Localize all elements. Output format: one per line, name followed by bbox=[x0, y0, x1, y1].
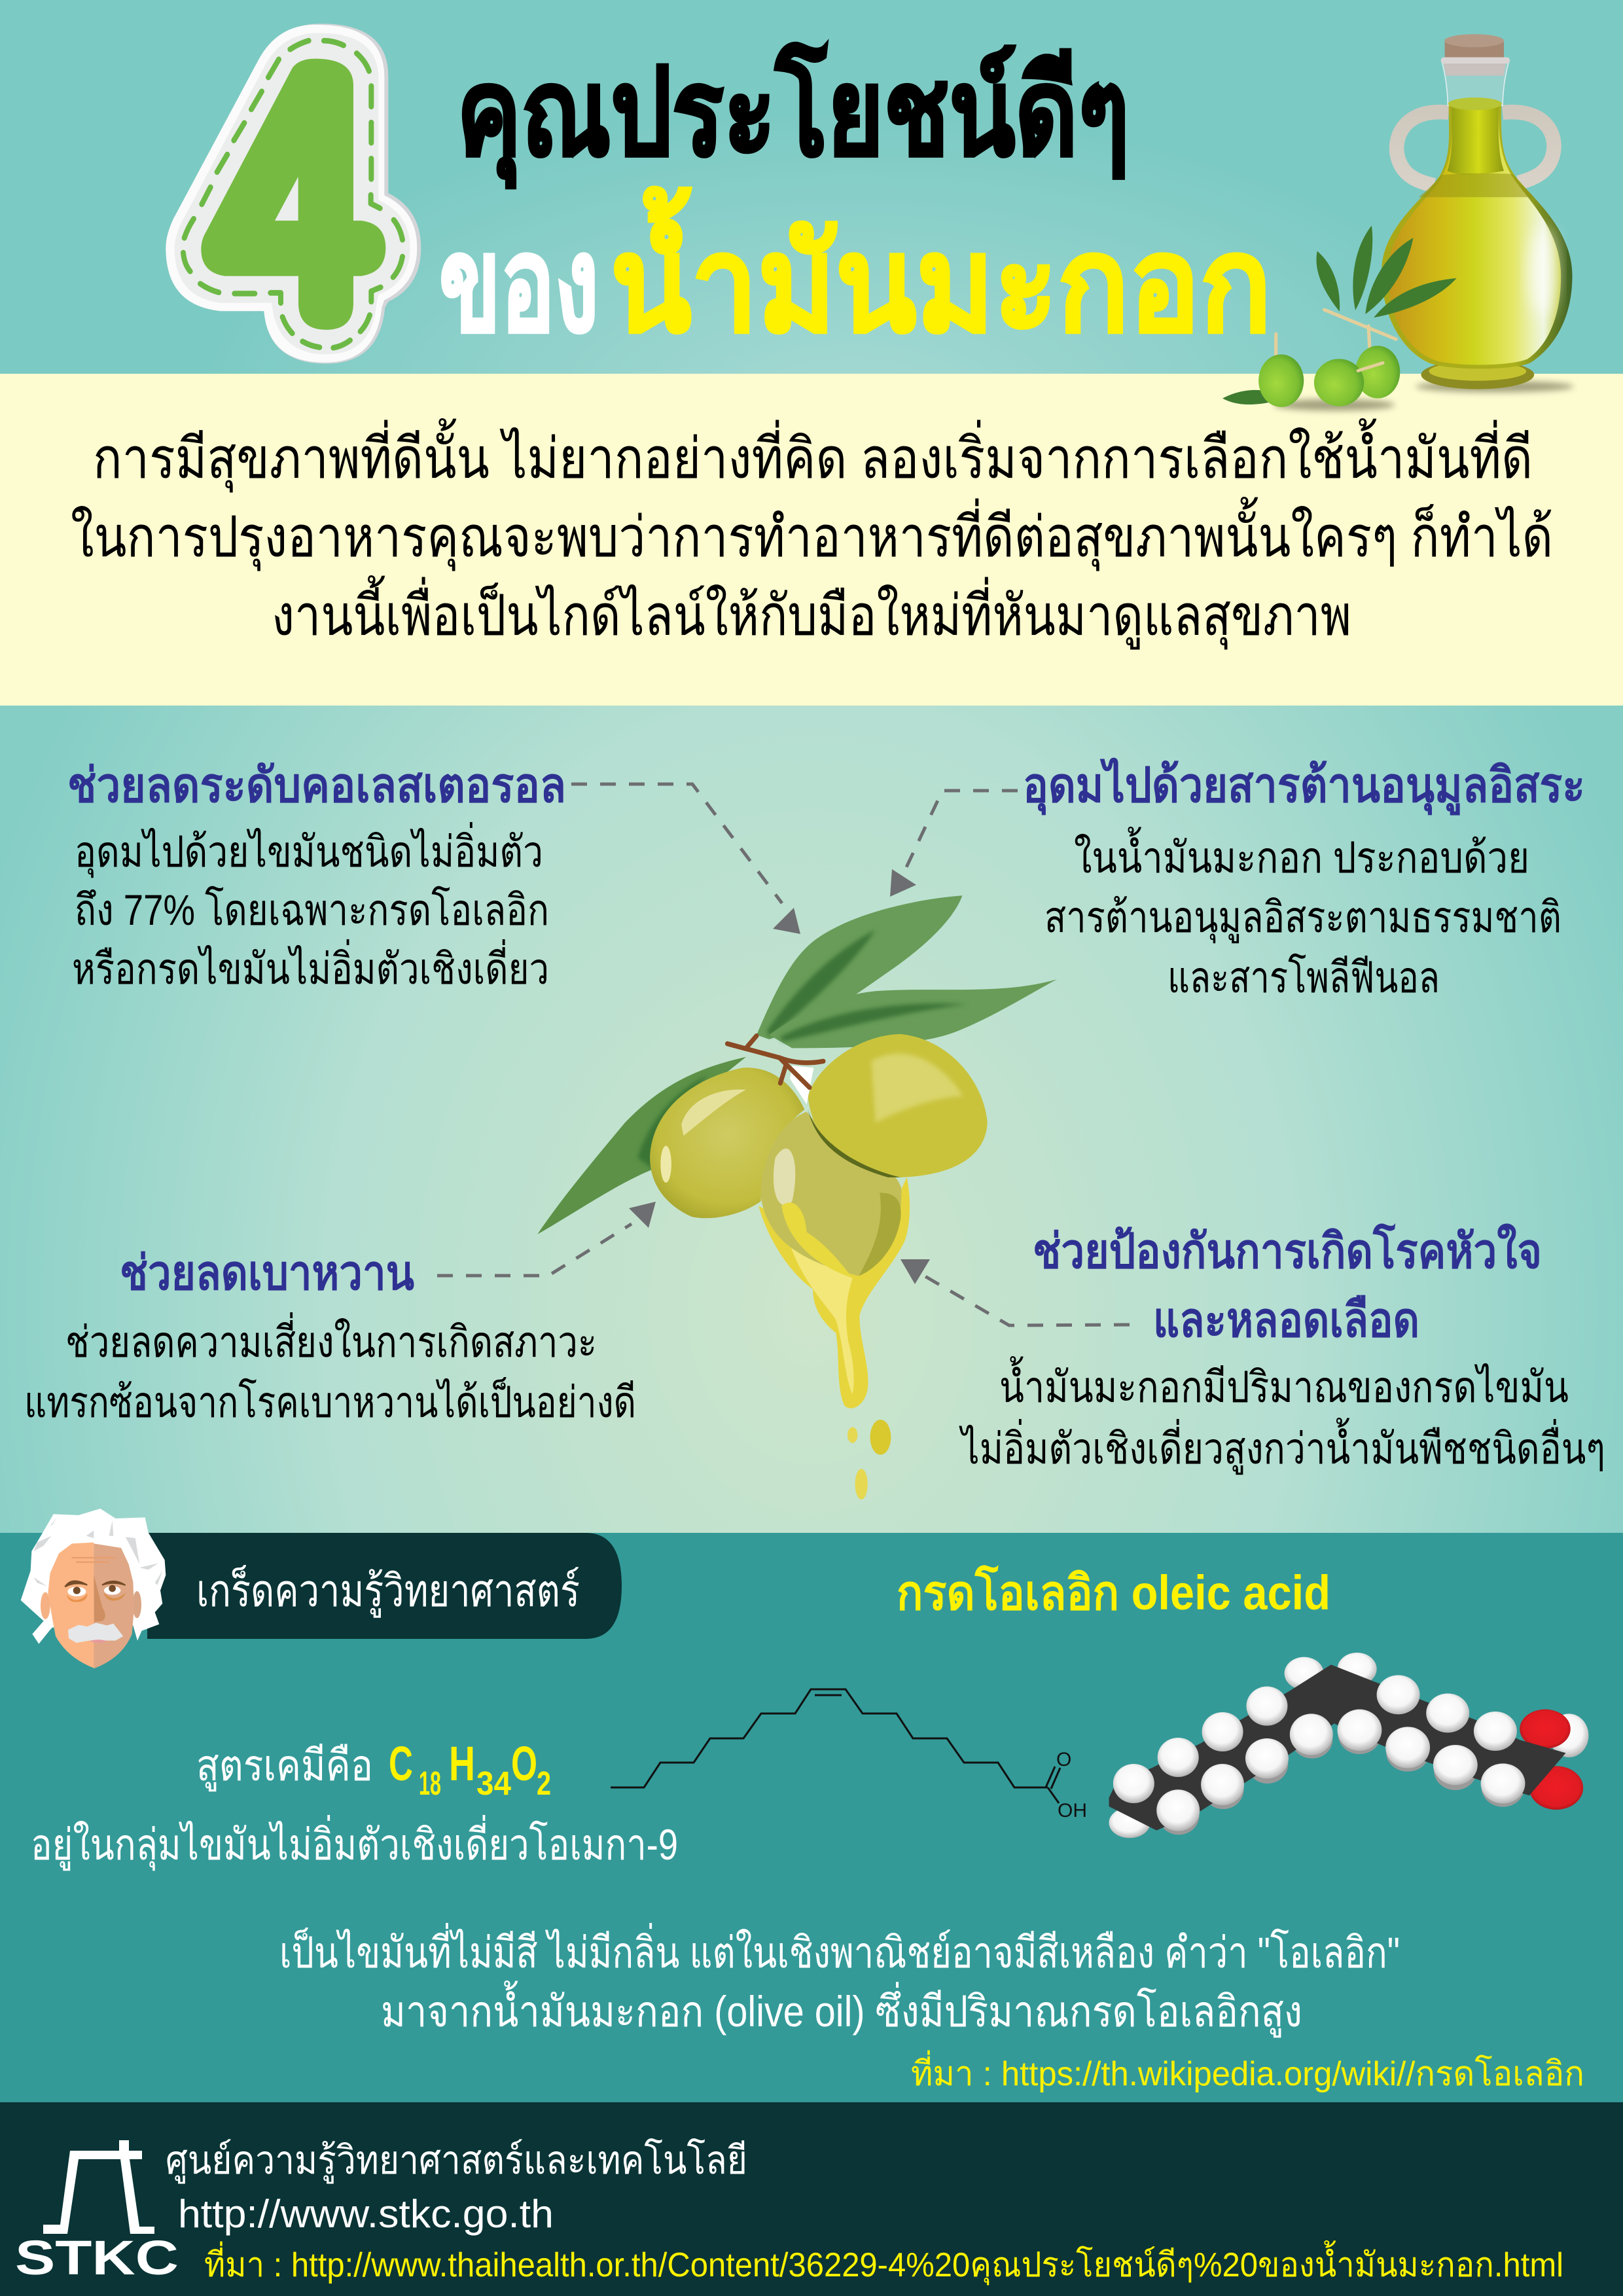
back hydrogens bbox=[1158, 1715, 1524, 1835]
white gap between stems bbox=[790, 1066, 813, 1104]
benefits panel background bbox=[0, 706, 1623, 1533]
right leaf bbox=[769, 979, 1057, 1048]
arrow: heart bbox=[901, 1259, 1130, 1325]
illustration: olive branch dripping oil bbox=[537, 895, 1057, 1499]
hair bbox=[21, 1509, 166, 1644]
mustache bbox=[68, 1623, 123, 1643]
ears bbox=[41, 1592, 50, 1619]
arrow: cholesterol bbox=[571, 784, 800, 934]
oil drops bbox=[870, 1420, 891, 1455]
benefit: diabetes bbox=[24, 1246, 636, 1426]
eyes bbox=[65, 1581, 126, 1602]
benefit: heart disease bbox=[959, 1223, 1605, 1475]
base bbox=[1421, 360, 1534, 389]
description paragraph bbox=[279, 1923, 1400, 2038]
science tips pill bbox=[147, 1533, 622, 1639]
formula: 2 bbox=[537, 1765, 551, 1802]
pill label: เกร็ดความรู้วิทยาศาสตร์ bbox=[196, 1565, 580, 1618]
chemical formula text: สูตรเคมีคือ bbox=[196, 1741, 373, 1792]
footer website: http://www.stkc.go.th bbox=[178, 2192, 554, 2236]
small olives bbox=[1258, 355, 1304, 407]
heading: ช่วยลดเบาหวาน bbox=[120, 1246, 414, 1300]
bottom olive bbox=[760, 1111, 901, 1276]
chemical formula text: อยู่ในกลุ่มไขมันไม่อิ่มตัวเชิงเดี่ยวโอเมกา-9 bbox=[31, 1815, 678, 1871]
dripping oil bbox=[758, 1177, 910, 1408]
hydroxyl label: OH bbox=[1058, 1800, 1087, 1821]
front hydrogens bbox=[1113, 1675, 1525, 1831]
chemical formula text bbox=[31, 1736, 678, 1871]
benefit: cholesterol: อุดมไปด้วยไขมันชนิดไม่อิ่มตัว bbox=[75, 822, 543, 878]
benefit: cholesterol: ถึง 77% โดยเฉพาะกรดโอเลอิก bbox=[75, 886, 549, 934]
carbon chain bbox=[1109, 1664, 1566, 1831]
formula: H bbox=[449, 1736, 475, 1791]
formula bbox=[389, 1736, 551, 1802]
number 4 badge bbox=[166, 24, 421, 364]
top-right olive bbox=[808, 1034, 988, 1177]
formula: 34 bbox=[476, 1765, 512, 1802]
benefit: antioxidants bbox=[1023, 757, 1585, 1001]
title line 2 white: ของ bbox=[439, 210, 599, 359]
icon: olive oil bottle with olives bbox=[1222, 34, 1573, 411]
bottle body bbox=[1382, 105, 1572, 368]
heading line 2: และหลอดเลือด bbox=[1153, 1293, 1419, 1347]
benefit: diabetes: ช่วยลดความเสี่ยงในการเกิดสภาวะ bbox=[65, 1312, 597, 1366]
intro panel background bbox=[0, 374, 1623, 706]
face bbox=[48, 1543, 95, 1668]
space-filling model of oleic acid bbox=[1109, 1653, 1588, 1838]
heading: oleic acid: กรดโอเลอิก oleic acid bbox=[897, 1564, 1330, 1620]
lower-left leaf bbox=[537, 1057, 746, 1234]
formula: 18 bbox=[419, 1765, 441, 1802]
left olive bbox=[650, 1067, 804, 1218]
STKC logo bbox=[15, 2140, 179, 2285]
benefit: cholesterol bbox=[67, 758, 566, 993]
cork bbox=[1445, 41, 1504, 59]
title line 2 yellow: น้ำมันมะกอก bbox=[611, 187, 1272, 359]
nose shadow bbox=[94, 1575, 105, 1622]
intro text: งานนี้เพื่อเป็นไกด์ไลน์ให้กับมือใหม่ที่หันมาดูแลสุขภาพ bbox=[272, 575, 1351, 650]
skeletal formula of oleic acid bbox=[611, 1689, 1087, 1821]
benefit: antioxidants: และสารโพลีฟีนอล bbox=[1168, 953, 1440, 1001]
stems bbox=[727, 1036, 823, 1088]
arrow: antioxidants bbox=[890, 791, 1018, 897]
oxygen label: O bbox=[1056, 1749, 1071, 1770]
heading line 1: ช่วยป้องกันการเกิดโรคหัวใจ bbox=[1033, 1223, 1542, 1278]
logo wordmark: STKC bbox=[15, 2231, 179, 2285]
shadows bbox=[1274, 381, 1573, 411]
forehead lines bbox=[71, 1558, 115, 1562]
arrow: diabetes bbox=[437, 1202, 656, 1276]
wikipedia source: ที่มา : https://th.wikipedia.org/wiki//กรดโอเลอิก bbox=[911, 2050, 1584, 2093]
icon: Einstein face bbox=[21, 1509, 166, 1668]
sprig branch bbox=[1276, 310, 1396, 360]
description paragraph: เป็นไขมันที่ไม่มีสี ไม่มีกลิ่น แต่ในเชิงพาณิชย์อาจมีสีเหลือง คำว่า "โอเลอิก" bbox=[279, 1923, 1400, 1977]
title line 1: คุณประโยชน์ดีๆ bbox=[457, 42, 1130, 188]
handles bbox=[1397, 112, 1554, 185]
oxygen atoms bbox=[1520, 1710, 1571, 1749]
formula: O bbox=[511, 1736, 537, 1791]
sprig leaves bbox=[1222, 226, 1457, 404]
top and end hydrogens bbox=[1109, 1653, 1588, 1838]
benefit: cholesterol: หรือกรดไขมันไม่อิ่มตัวเชิงเดี่ยว bbox=[72, 939, 549, 993]
intro text bbox=[71, 418, 1553, 650]
benefit: antioxidants: ในน้ำมันมะกอก ประกอบด้วย bbox=[1074, 827, 1529, 882]
glass neck bbox=[1442, 60, 1509, 105]
footer background bbox=[0, 2102, 1623, 2296]
footer source: ที่มา : http://www.thaihealth.or.th/Content/36229-4%20คุณประโยชน์ดีๆ%20ของน้ำมันมะกอก.html bbox=[204, 2240, 1563, 2286]
benefit: diabetes: แทรกซ้อนจากโรคเบาหวานได้เป็นอย่างดี bbox=[24, 1376, 636, 1426]
formula: C bbox=[389, 1736, 413, 1791]
science panel background bbox=[0, 1533, 1623, 2102]
header background bbox=[0, 0, 1623, 374]
description paragraph: มาจากน้ำมันมะกอก (olive oil) ซึ่งมีปริมาณกรดโอเลอิกสูง bbox=[381, 1981, 1302, 2038]
heading: ช่วยลดระดับคอเลสเตอรอล bbox=[67, 758, 566, 812]
upper leaf bbox=[757, 895, 962, 1039]
footer organisation name: ศูนย์ความรู้วิทยาศาสตร์และเทคโนโลยี bbox=[166, 2138, 747, 2184]
